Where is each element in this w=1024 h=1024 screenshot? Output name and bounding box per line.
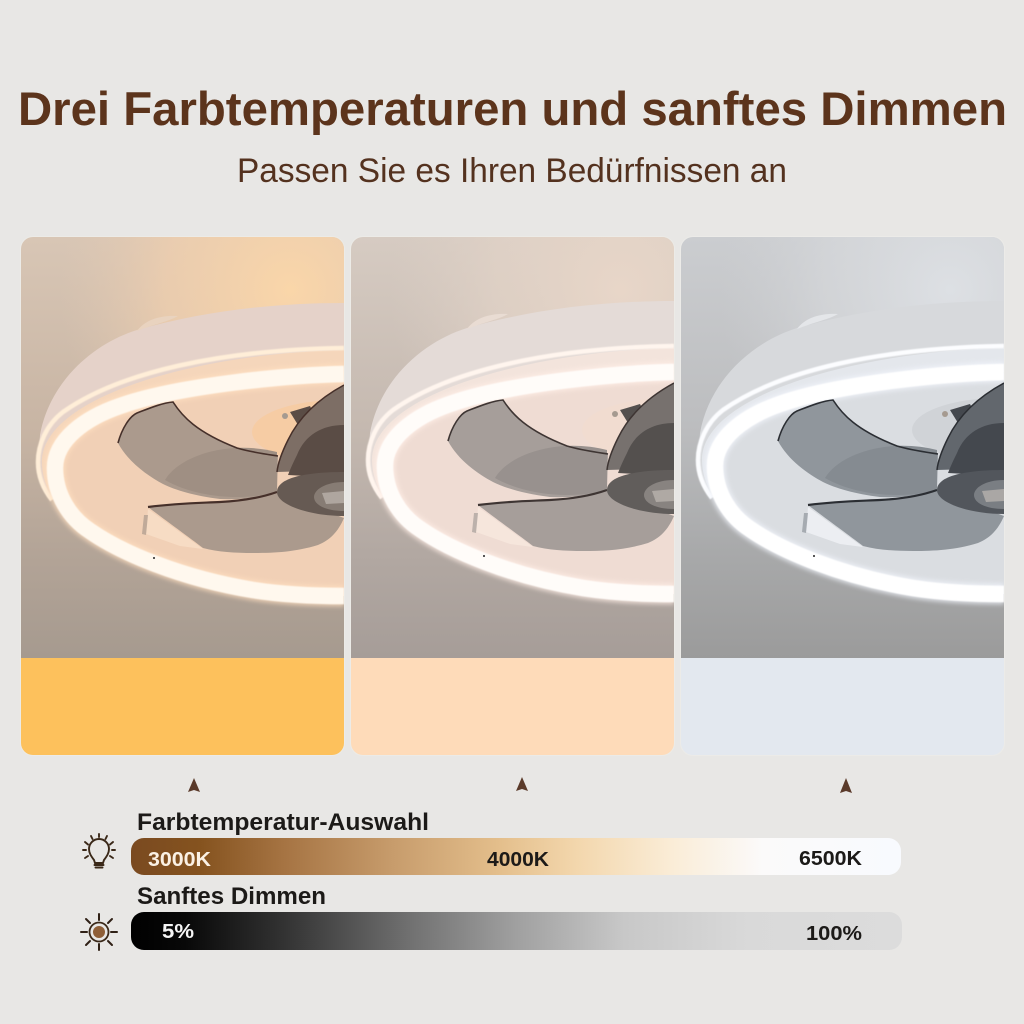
dimming bar [131, 912, 902, 950]
heading: soft dimming: Sanftes Dimmen [137, 883, 326, 910]
fan photo warm [35, 303, 344, 608]
panel: 4000K neutral light [351, 237, 674, 755]
dimming bar: 5% [162, 921, 194, 943]
dimming bar: 100% [806, 923, 862, 945]
arrow: neutral marker [516, 777, 528, 791]
swatch: pale peach [351, 658, 674, 755]
arrow: cool marker [840, 778, 852, 793]
subtitle: Passen Sie es Ihren Bedürfnissen an [237, 152, 787, 190]
colour temperature bar: 6500K [799, 848, 863, 870]
fan photo cool [698, 301, 1024, 594]
panel: 3000K warm light [21, 237, 344, 755]
icon: light bulb [83, 834, 115, 868]
icon: sun brightness [81, 914, 117, 950]
swatch: cool white [681, 658, 1004, 755]
panel: 6500K cool light [680, 236, 1024, 756]
heading: colour temperature selection: Farbtemperatur-Auswahl [137, 809, 429, 836]
swatch: amber [21, 658, 344, 755]
colour temperature bar: 4000K [487, 849, 550, 871]
title: Drei Farbtemperaturen und sanftes Dimmen [18, 82, 1007, 135]
colour temperature bar [131, 838, 901, 875]
colour temperature bar: 3000K [148, 849, 212, 871]
fan photo neutral [365, 301, 674, 606]
arrow: warm marker [188, 778, 200, 792]
